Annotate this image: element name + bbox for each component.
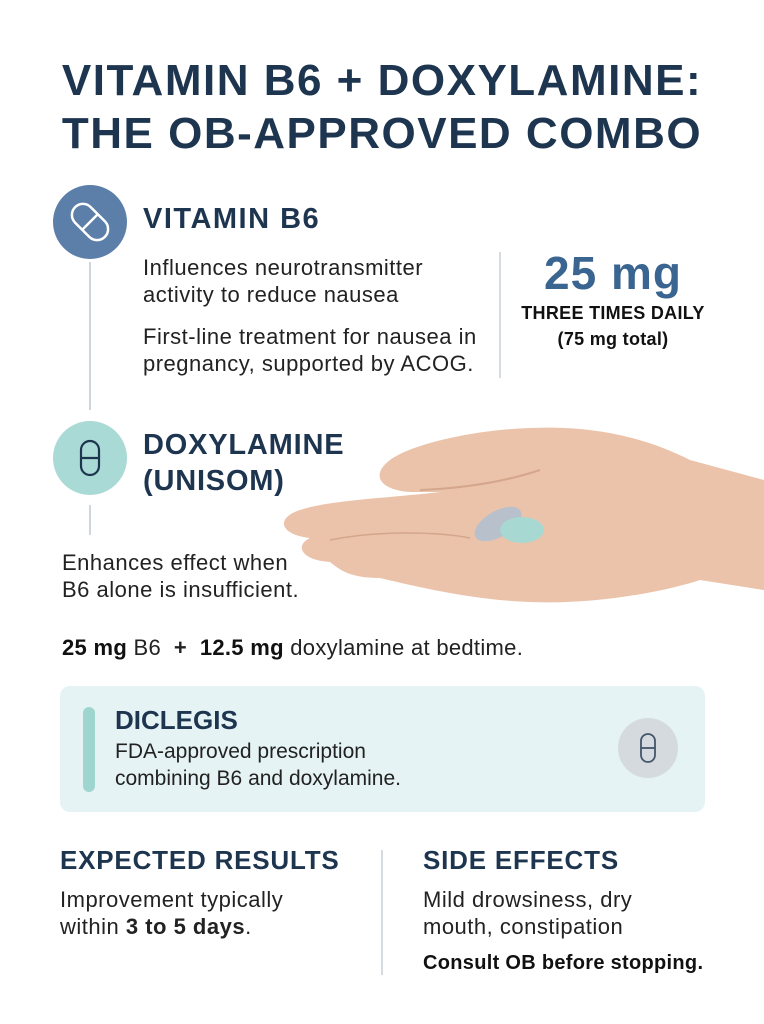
text: results: Improvement typically — [60, 887, 283, 912]
heading: side effects: SIDE EFFECTS — [423, 845, 619, 875]
panel: side effects — [423, 845, 703, 974]
text: consult OB: Consult OB before stopping. — [423, 952, 703, 974]
heading: vitamin B6: VITAMIN B6 — [143, 203, 320, 235]
text: diclegis description — [115, 740, 401, 790]
text: side effects: Mild drowsiness, dry — [423, 887, 632, 912]
panel: expected results — [60, 845, 340, 939]
text: diclegis description: combining B6 and doxylamine. — [115, 767, 401, 790]
icon: vitamin B6 capsule — [53, 185, 127, 259]
dose callout: 25 mg: THREE TIMES DAILY — [521, 303, 705, 323]
heading: doxylamine: (UNISOM) — [143, 465, 285, 497]
accent bar — [83, 707, 95, 792]
divider — [499, 252, 501, 378]
dose callout: 25 mg: 25 mg — [544, 247, 682, 299]
panel: diclegis — [60, 686, 705, 812]
title — [62, 56, 702, 158]
text: doxylamine description: Enhances effect when — [62, 550, 288, 575]
text: diclegis description: FDA-approved prescription — [115, 740, 366, 763]
text: B6 description: pregnancy, supported by ACOG. — [143, 351, 474, 376]
text: doxylamine description — [62, 550, 299, 602]
title: VITAMIN B6 + DOXYLAMINE: — [62, 56, 702, 105]
icon: doxylamine capsule — [53, 421, 127, 495]
title: THE OB-APPROVED COMBO — [62, 109, 702, 158]
divider — [381, 850, 383, 975]
dose callout: 25 mg: (75 mg total) — [558, 329, 668, 349]
timeline line — [89, 262, 91, 410]
icon: capsule — [618, 718, 678, 778]
text: B6 description: Influences neurotransmitter — [143, 255, 423, 280]
heading: doxylamine: DOXYLAMINE — [143, 429, 344, 461]
text: results: within 3 to 5 days. — [60, 914, 252, 939]
text: B6 description — [143, 255, 477, 376]
heading: expected results: EXPECTED RESULTS — [60, 845, 340, 875]
illustration: hand with pills — [284, 428, 764, 602]
dose callout: 25 mg — [521, 247, 705, 349]
heading: diclegis: DICLEGIS — [115, 705, 238, 735]
text: B6 description: activity to reduce nausea First-line treatment for nausea in — [143, 282, 477, 349]
text: results — [60, 887, 283, 939]
text: side effects: mouth, constipation — [423, 914, 623, 939]
text: side effects — [423, 887, 632, 939]
heading: doxylamine — [143, 429, 344, 497]
text: combined dose: 25 mg B6 + 12.5 mg doxylamine at bedtime. — [62, 635, 523, 660]
timeline stub — [89, 505, 91, 535]
text: doxylamine description: B6 alone is insufficient. — [62, 577, 299, 602]
